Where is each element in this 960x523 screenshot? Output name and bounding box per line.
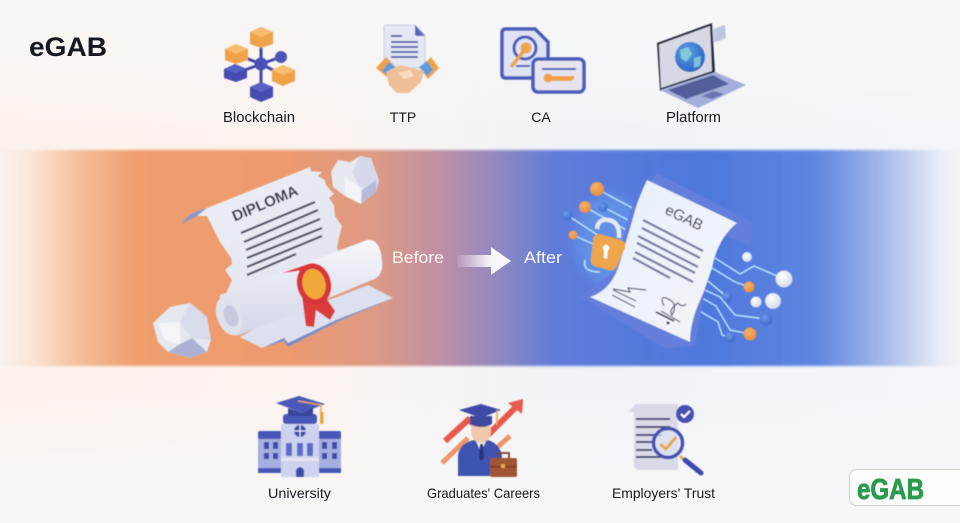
illustration: paper diploma	[153, 156, 393, 358]
icon: laptop with globe	[657, 23, 746, 108]
document text lines	[633, 220, 703, 282]
arrow: before to after	[457, 247, 511, 275]
label: Before: Before	[392, 248, 444, 267]
diploma text lines	[241, 202, 322, 275]
illustration: digital eGAB document	[562, 173, 792, 349]
cube: orange top	[250, 27, 273, 48]
signature marks	[612, 288, 686, 322]
crumpled paper bottom	[153, 303, 211, 358]
label: Blockchain: Blockchain	[223, 110, 295, 126]
label: CA: CA	[531, 109, 551, 125]
cube: orange right	[272, 65, 295, 86]
crumpled paper top	[331, 156, 379, 204]
icon: TTP document and handshake	[376, 25, 439, 93]
label: After: After	[524, 248, 562, 267]
ribbon seal	[282, 260, 336, 327]
icon: employer verification	[628, 404, 701, 473]
label: University: University	[268, 485, 331, 501]
paper sheet	[590, 180, 737, 342]
label: TTP: TTP	[390, 109, 416, 125]
back panel	[580, 173, 753, 349]
before and after band	[0, 150, 960, 366]
logo badge: eGAB: eGAB	[857, 474, 924, 506]
padlock	[591, 220, 625, 270]
cube: blue left	[224, 64, 247, 82]
circuit lines	[567, 189, 784, 337]
icon: graduate career growth	[442, 399, 523, 477]
cube: blue bottom	[250, 82, 273, 102]
icon: university	[258, 396, 341, 477]
diploma sheet	[182, 167, 345, 320]
cube: orange left	[225, 44, 248, 64]
glow	[576, 194, 644, 286]
lower sheet	[240, 285, 393, 348]
icon: blockchain	[224, 27, 295, 102]
icon: CA certificate and key	[502, 29, 584, 92]
diploma heading: DIPLOMA	[230, 182, 301, 225]
document heading: eGAB	[662, 202, 706, 234]
label: Graduates' Careers: Graduates' Careers	[427, 485, 540, 501]
brand title: eGAB	[29, 32, 107, 62]
label: Platform: Platform	[666, 110, 721, 126]
data nodes	[562, 182, 792, 342]
label: Employers' Trust: Employers' Trust	[612, 485, 715, 501]
diploma roll	[220, 240, 382, 335]
logo badge: eGAB	[850, 470, 960, 506]
